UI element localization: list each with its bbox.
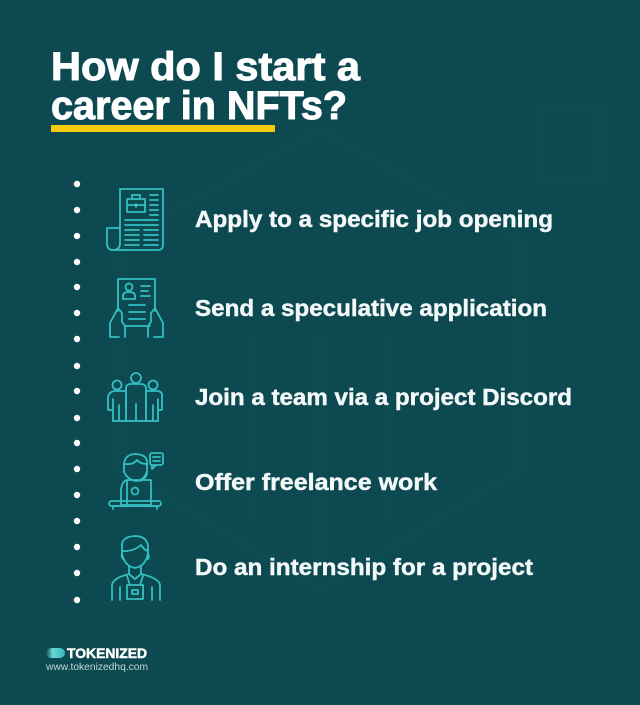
title: How do I start a <box>51 45 361 89</box>
logo <box>45 645 148 673</box>
icon: freelancer at laptop <box>109 453 163 509</box>
title: career in NFTs? <box>51 84 347 128</box>
title <box>51 45 361 128</box>
timeline dots <box>74 181 80 603</box>
label: apply: Apply to a specific job opening <box>195 206 553 232</box>
label: internship: Do an internship for a project <box>195 554 533 580</box>
label: speculative: Send a speculative application <box>195 295 547 321</box>
icon: team of people <box>108 373 162 421</box>
logo: www.tokenizedhq.com <box>45 661 148 673</box>
title underline <box>51 125 275 132</box>
label: freelance: Offer freelance work <box>195 469 437 495</box>
label: discord: Join a team via a project Discord <box>195 384 572 410</box>
icon: hands holding application <box>110 279 163 337</box>
icon: intern with badge <box>112 536 160 600</box>
icon: job listing newspaper <box>107 189 163 250</box>
logo: TOKENIZED <box>67 645 147 661</box>
